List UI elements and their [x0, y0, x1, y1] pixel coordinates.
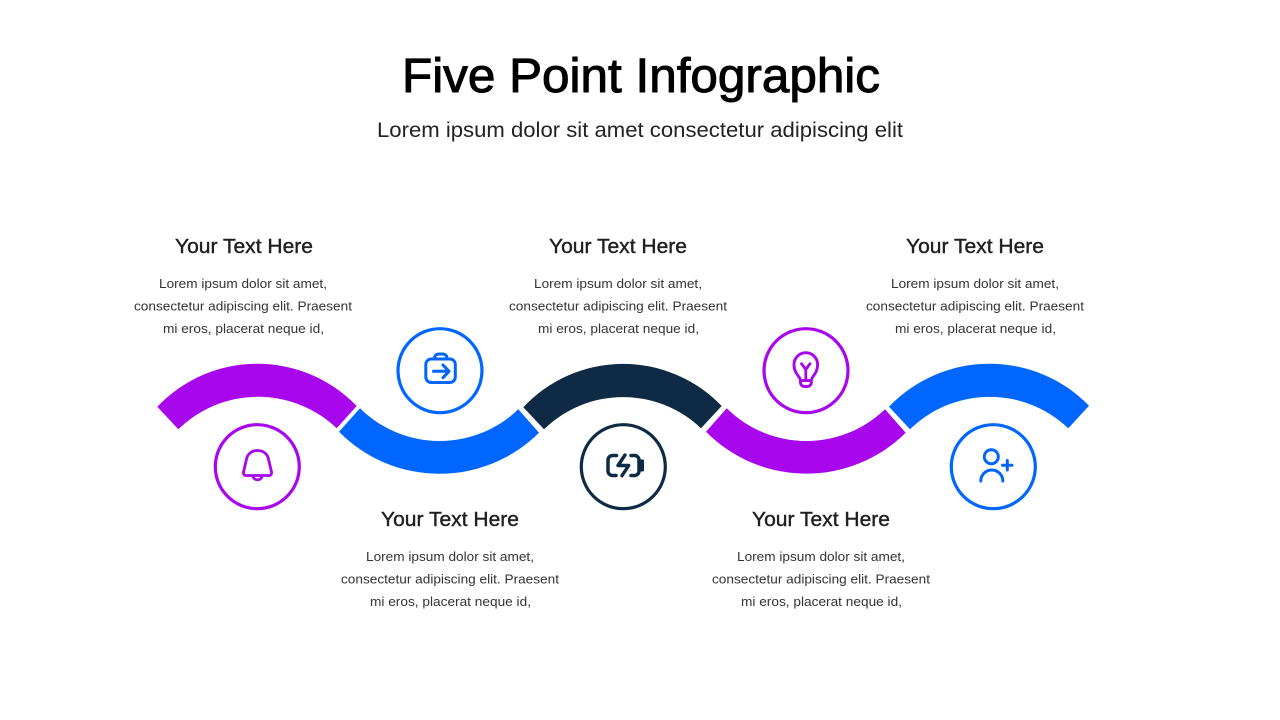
- text block: point 5: consectetur adipiscing elit. Praesent: [866, 298, 1084, 314]
- text block: point 3: consectetur adipiscing elit. Praesent: [509, 298, 727, 314]
- wave segment 5: blue arch: [889, 364, 1089, 429]
- wave segment 1: purple arch: [157, 364, 357, 429]
- wave segment 4: purple valley: [706, 408, 906, 474]
- text block: point 1: [134, 235, 352, 336]
- text block: point 1: mi eros, placerat neque id,: [163, 321, 324, 336]
- icon: add user: [951, 425, 1035, 509]
- text block: point 4: Lorem ipsum dolor sit amet,: [737, 549, 905, 564]
- wave segment 3: navy arch: [523, 364, 722, 429]
- text block: point 1: consectetur adipiscing elit. Praesent: [134, 298, 352, 314]
- text block: point 1: Lorem ipsum dolor sit amet,: [159, 276, 327, 291]
- text block: point 5: Your Text Here: [906, 235, 1044, 258]
- text block: point 3: mi eros, placerat neque id,: [538, 321, 699, 336]
- text block: point 2: [341, 508, 559, 609]
- text block: point 2: consectetur adipiscing elit. Praesent: [341, 572, 559, 586]
- text block: point 4: [712, 508, 930, 609]
- text block: point 2: Lorem ipsum dolor sit amet,: [366, 549, 534, 564]
- text block: point 4: mi eros, placerat neque id,: [741, 594, 902, 609]
- wave segment 2: blue valley: [339, 408, 539, 474]
- text block: point 1: Your Text Here: [175, 235, 313, 258]
- text block: point 5: mi eros, placerat neque id,: [895, 321, 1056, 336]
- text block: point 5: [866, 235, 1084, 336]
- text block: point 3: Lorem ipsum dolor sit amet,: [534, 276, 702, 291]
- title: Five Point Infographic: [402, 50, 880, 103]
- text block: point 4: consectetur adipiscing elit. Praesent: [712, 572, 930, 586]
- text block: point 5: Lorem ipsum dolor sit amet,: [891, 276, 1059, 291]
- subtitle: Lorem ipsum dolor sit amet consectetur adipiscing elit: [377, 119, 903, 142]
- text block: point 2: Your Text Here: [381, 508, 519, 531]
- text block: point 2: mi eros, placerat neque id,: [370, 594, 531, 609]
- icon: charging battery: [581, 425, 665, 509]
- text block: point 3: [509, 235, 727, 336]
- text block: point 4: Your Text Here: [752, 508, 890, 531]
- icon: light bulb: [764, 329, 848, 413]
- icon: briefcase with arrow: [398, 329, 482, 413]
- text block: point 3: Your Text Here: [549, 235, 687, 258]
- icon: bell: [215, 425, 299, 509]
